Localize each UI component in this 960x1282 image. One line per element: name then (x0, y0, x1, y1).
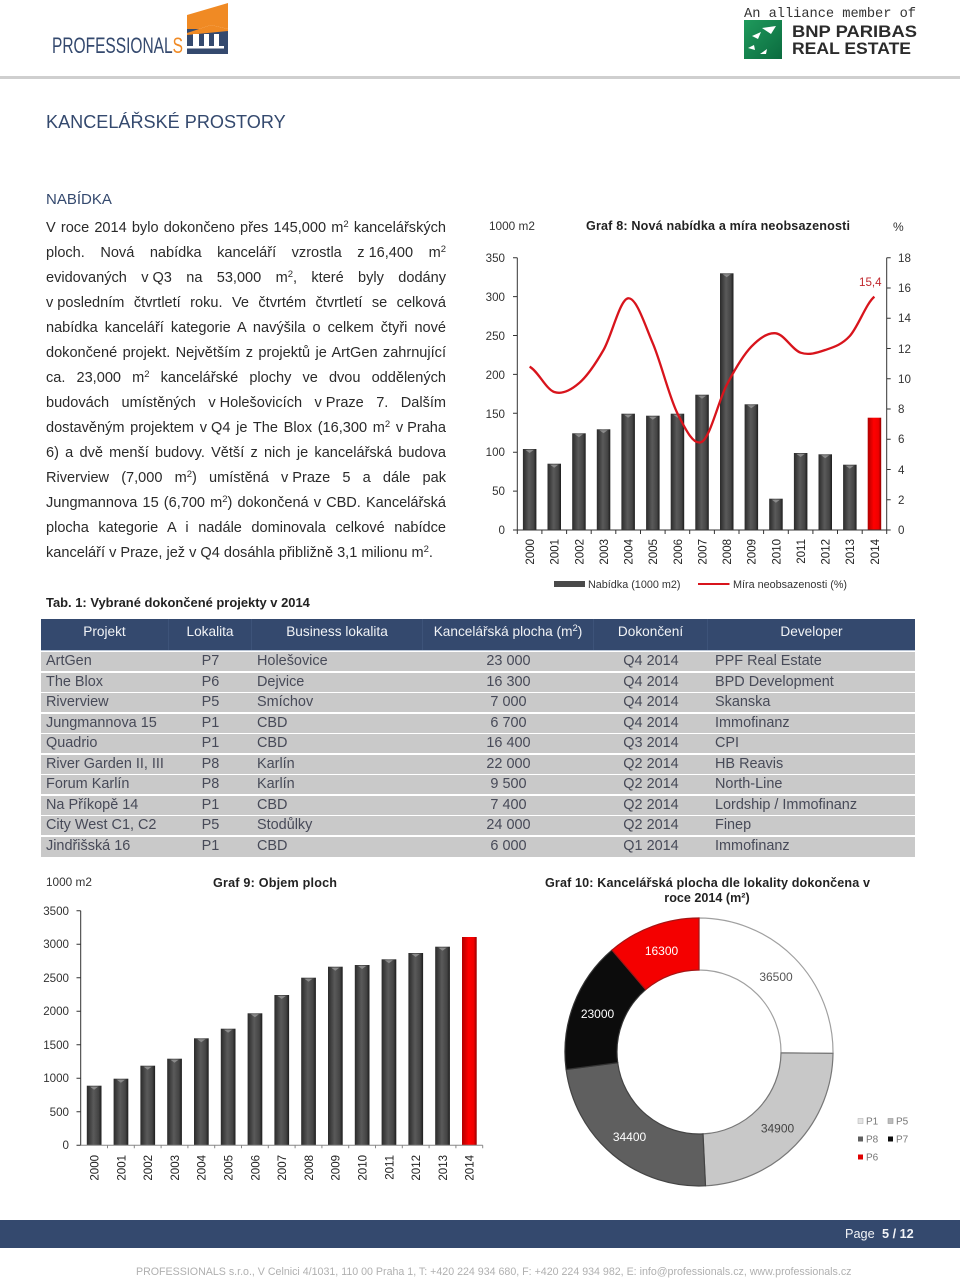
row: Na Příkopě 14: CBD (257, 796, 287, 812)
chart 9 value axis labels: 0 (63, 1139, 69, 1152)
row: Jindřišská 16: CBD (257, 838, 287, 854)
row: City West: P5 (202, 817, 219, 833)
donut value labels: 34400 (613, 1130, 647, 1144)
row: Quadrio: 16 400 (486, 735, 531, 751)
chart 8 year labels: 2013 (845, 539, 857, 565)
row: Jindřišská 16: Q1 2014 (623, 838, 679, 854)
chart 8 right axis labels: 16 (898, 282, 911, 295)
chart 8 left axis labels: 350 (486, 252, 505, 265)
donut value labels: 23000 (581, 1007, 615, 1021)
vacancy value label: 15,4 (859, 276, 882, 289)
row: ArtGen: 23 000 (486, 653, 531, 669)
row: ArtGen: PPF Real Estate (715, 653, 822, 669)
page heading: KANCELÁŘSKÉ PROSTORY (46, 112, 286, 132)
chart 9 year labels: 2001 (116, 1155, 128, 1181)
chart 8 left axis labels: 150 (486, 408, 505, 421)
row: Na Příkopě 14 (41, 796, 915, 814)
table header: Dokončení (618, 624, 683, 639)
donut slice P5 (703, 1053, 833, 1186)
chart 8 legend (554, 579, 847, 591)
donut legend: P8 (866, 1134, 879, 1146)
donut value labels: 36500 (759, 970, 793, 984)
row: Jindřišská 16 (41, 836, 915, 856)
row: The Blox: P6 (202, 674, 219, 690)
row: Forum Karlín: P8 (202, 776, 219, 792)
chart 8 left axis labels (486, 252, 505, 537)
chart 9 year labels: 2006 (250, 1155, 262, 1181)
table header: Developer (780, 624, 843, 639)
footer band with page number: 5 / 12 (882, 1227, 914, 1241)
chart 8 legend: Míra neobsazenosti (%) (733, 579, 847, 591)
chart 8 right axis labels: 18 (898, 252, 911, 265)
chart 9 unit: 1000 m2 (46, 875, 92, 889)
body text: dokončené projekt. Největším z projektů je ArtGen zahrnující (46, 345, 446, 361)
chart 8 title: Graf 8: Nová nabídka a míra neobsazenosti (586, 219, 850, 233)
chart: Graf 8 new supply and vacancy (486, 219, 911, 591)
chart 9 value axis labels: 1000 (43, 1072, 69, 1085)
row: Quadrio: P1 (202, 735, 219, 751)
chart 8 bars (523, 273, 881, 530)
row: Forum Karlín (41, 775, 915, 794)
row: Riverview: 7 000 (490, 694, 527, 710)
row: Jungmannova 15: CBD (257, 714, 287, 730)
row: Na Příkopě 14: 7 400 (490, 796, 527, 812)
row: Quadrio (41, 734, 915, 753)
chart 9 year labels: 2002 (143, 1155, 155, 1181)
row: City West: Finep (715, 817, 751, 833)
chart 9 year labels: 2013 (438, 1155, 450, 1181)
row: City West: 24 000 (486, 817, 531, 833)
row: Quadrio: Quadrio (46, 735, 97, 751)
row: The Blox: The Blox (46, 674, 103, 690)
chart 9 year labels: 2014 (465, 1154, 477, 1181)
chart 8 legend: Nabídka (1000 m2) (588, 579, 680, 591)
chart 9 year labels: 2010 (358, 1155, 370, 1181)
footer band with page number: Page (845, 1227, 875, 1241)
chart 9 title: Graf 9: Objem ploch (213, 876, 337, 890)
row: The Blox (41, 672, 915, 692)
chart 8 year labels: 2014 (870, 538, 882, 565)
chart 10 title (545, 876, 870, 905)
chart 8 year labels: 2012 (821, 539, 833, 565)
row: River Garden: 22 000 (486, 756, 531, 772)
chart 8 year labels: 2001 (550, 539, 562, 565)
chart 8 right axis labels: 14 (898, 312, 911, 325)
row: Riverview: Q4 2014 (623, 694, 679, 710)
row: River Garden: River Garden II, III (46, 756, 164, 772)
body text: nabídka kanceláří kategorie A navýšila o celkem čtyři nové (46, 320, 446, 336)
row: Jindřišská 16: Immofinanz (715, 838, 790, 854)
chart 8 year labels (525, 538, 882, 565)
header logo: Professionals: PROFESSIONALS (52, 33, 183, 58)
chart 8 year labels: 2010 (771, 539, 783, 565)
body text: plocha kategorie A i nadále dominovala celkové nabídce (46, 520, 446, 536)
body text: Riverview (7,000 m2) umístěná v Praze 5 a dále pak (46, 469, 446, 486)
row: Jungmannova 15: 6 700 (490, 714, 527, 730)
table header (41, 619, 915, 651)
chart 8 right axis labels: 8 (898, 403, 904, 416)
row: Jindřišská 16: P1 (202, 838, 219, 854)
row: The Blox: BPD Development (715, 674, 834, 690)
table header: Lokalita (186, 624, 234, 639)
chart 8 right axis labels: 10 (898, 373, 911, 386)
chart 9 value axis labels: 1500 (43, 1039, 69, 1052)
row: Na Příkopě 14: Na Příkopě 14 (46, 796, 138, 812)
donut slice P6 (612, 918, 699, 990)
donut legend (858, 1116, 909, 1164)
row: Forum Karlín: Karlín (257, 776, 295, 792)
chart 8 left axis labels: 300 (486, 291, 505, 304)
row: Jungmannova 15: Q4 2014 (623, 714, 679, 730)
row: ArtGen: ArtGen (46, 653, 92, 669)
chart 8 left axis labels: 100 (486, 446, 505, 459)
row: Forum Karlín: Q2 2014 (623, 776, 679, 792)
row: Quadrio: CBD (257, 735, 287, 751)
chart 8 right unit: % (893, 220, 904, 234)
chart 8 vacancy line (530, 297, 874, 443)
row: Quadrio: CPI (715, 735, 739, 751)
row: River Garden (41, 754, 915, 774)
chart 8 right axis labels: 4 (898, 464, 905, 477)
row: ArtGen (41, 652, 915, 671)
chart 8 year labels: 2007 (697, 539, 709, 565)
footer band with page number (0, 1220, 960, 1248)
row: City West (41, 816, 915, 835)
row: City West: City West C1, C2 (46, 817, 156, 833)
footer contact line: PROFESSIONALS s.r.o., V Celnici 4/1031, 110 00 Praha 1, T: +420 224 934 680, F: +420 224 934 982, E: info@professionals.cz, www.professionals.cz (136, 1266, 851, 1278)
row: Jungmannova 15: Immofinanz (715, 714, 790, 730)
row: Riverview: Smíchov (257, 694, 313, 710)
body text: 6) a dvě menší budovy. Větší z nich je kancelářská budova (46, 445, 446, 461)
chart 8 year labels: 2009 (747, 539, 759, 565)
chart 8 left axis labels: 0 (499, 524, 505, 537)
chart 8 right axis labels: 0 (898, 524, 904, 537)
row: River Garden: HB Reavis (715, 756, 783, 772)
body text: v posledním čtvrtletí roku. Ve čtvrtém čtvrtletí se celková (46, 295, 446, 311)
table header: Business lokalita (286, 624, 388, 639)
chart 8 right axis labels: 2 (898, 494, 904, 507)
row: Jindřišská 16: Jindřišská 16 (46, 838, 130, 854)
chart 9 axes (76, 911, 483, 1148)
chart 8 year labels: 2003 (599, 539, 611, 565)
donut slice P1 (699, 918, 833, 1053)
chart 8 year labels: 2000 (525, 539, 537, 565)
row: The Blox: Q4 2014 (623, 674, 679, 690)
chart 8 left axis labels: 200 (486, 369, 505, 382)
donut value labels (581, 944, 795, 1144)
chart 9 value axis labels: 500 (50, 1106, 69, 1119)
chart 9 bars (87, 937, 477, 1145)
chart 9 year labels: 2007 (277, 1155, 289, 1181)
chart 9 year labels (90, 1154, 477, 1181)
row: Forum Karlín: 9 500 (490, 776, 527, 792)
body text: Jungmannova 15 (6,700 m2) dokončená v CBD. Kancelářská (46, 494, 446, 511)
chart 9 value axis labels (43, 905, 69, 1152)
row: Riverview: Skanska (715, 694, 770, 710)
chart 9 value axis labels: 2000 (43, 1005, 69, 1018)
row: Forum Karlín: Forum Karlín (46, 776, 129, 792)
chart 9 year labels: 2009 (331, 1155, 343, 1181)
chart 8 left axis labels: 50 (492, 485, 505, 498)
row: Riverview (41, 693, 915, 712)
chart: Graf 9 stock volume (43, 875, 484, 1181)
table: selected completed projects (41, 619, 915, 857)
chart 8 right axis labels: 12 (898, 343, 911, 356)
donut slice P7 (565, 950, 646, 1070)
body text: ca. 23,000 m2 kancelářské plochy ve dvou oddělených (46, 369, 446, 386)
chart 9 value axis labels: 3000 (43, 938, 69, 951)
chart 8 year labels: 2008 (722, 539, 734, 565)
row: City West: Stodůlky (257, 817, 312, 833)
row: Jungmannova 15 (41, 714, 915, 732)
chart 8 year labels: 2005 (648, 539, 660, 565)
body text: ploch. Nová nabídka kanceláří vzrostla z 16,400 m2 (46, 244, 446, 261)
header logo: BNP Paribas Real Estate: An alliance member of (744, 7, 916, 22)
row: River Garden: Q2 2014 (623, 756, 679, 772)
chart 9 year labels: 2003 (170, 1155, 182, 1181)
chart: Graf 10 donut by location (545, 876, 909, 1187)
donut value labels: 34900 (761, 1122, 795, 1136)
body text: V roce 2014 bylo dokončeno přes 145,000 m2 kancelářských (46, 219, 446, 236)
chart 9 year labels: 2000 (90, 1155, 102, 1181)
chart 9 year labels: 2008 (304, 1155, 316, 1181)
row: City West: Q2 2014 (623, 817, 679, 833)
donut legend: P7 (896, 1134, 909, 1146)
chart 8 axes (513, 258, 891, 534)
table header: Projekt (83, 624, 126, 639)
row: Na Příkopě 14: Lordship / Immofinanz (715, 796, 857, 812)
chart 8 year labels: 2004 (624, 538, 636, 565)
table caption: Tab. 1: Vybrané dokončené projekty v 2014 (46, 594, 310, 610)
body text (46, 219, 446, 561)
chart 10 title: Graf 10: Kancelářská plocha dle lokality dokončena v (545, 876, 870, 890)
donut value labels: 16300 (645, 944, 679, 958)
row: Quadrio: Q3 2014 (623, 735, 679, 751)
row: The Blox: Dejvice (257, 674, 304, 690)
row: Na Příkopě 14: Q2 2014 (623, 796, 679, 812)
row: Na Příkopě 14: P1 (202, 796, 219, 812)
chart 9 value axis labels: 2500 (43, 972, 69, 985)
body text: budovách umístěných v Holešovicích v Praze 7. Dalším (46, 395, 446, 411)
chart 8 right axis labels (898, 252, 911, 537)
row: ArtGen: P7 (202, 653, 219, 669)
row: ArtGen: Holešovice (257, 653, 328, 669)
body text: dostavěným projektem v Q4 je The Blox (16,300 m2 v Praha (46, 419, 446, 436)
header logo: BNP Paribas Real Estate: BNP PARIBAS (792, 22, 917, 41)
donut slice P8 (566, 1063, 706, 1186)
chart 8 year labels: 2006 (673, 539, 685, 565)
body text: evidovaných v Q3 na 53,000 m2, které byly dodány (46, 269, 446, 286)
donut legend: P6 (866, 1152, 879, 1164)
row: River Garden: P8 (202, 756, 219, 772)
donut legend: P5 (896, 1116, 909, 1128)
chart 9 year labels: 2004 (197, 1154, 209, 1181)
row: The Blox: 16 300 (486, 674, 531, 690)
row: Riverview: P5 (202, 694, 219, 710)
row: Jungmannova 15: Jungmannova 15 (46, 714, 157, 730)
table header: Kancelářská plocha (m2) (434, 623, 582, 639)
chart 8 left unit: 1000 m2 (489, 219, 535, 233)
row: River Garden: Karlín (257, 756, 295, 772)
chart 9 year labels: 2012 (411, 1155, 423, 1181)
row: Forum Karlín: North-Line (715, 776, 782, 792)
row: Jungmannova 15: P1 (202, 714, 219, 730)
row: Jindřišská 16: 6 000 (490, 838, 527, 854)
chart 8 right axis labels: 6 (898, 433, 904, 446)
chart 8 year labels: 2011 (796, 539, 808, 564)
header logo: Professionals (52, 3, 228, 58)
section heading: Nabídka: NABÍDKA (46, 191, 112, 208)
row: Riverview: Riverview (46, 694, 109, 710)
chart 9 year labels: 2011 (384, 1155, 396, 1180)
donut legend: P1 (866, 1116, 879, 1128)
header logo: BNP Paribas Real Estate (744, 7, 917, 59)
chart 9 year labels: 2005 (224, 1155, 236, 1181)
chart 10 title: roce 2014 (m²) (664, 891, 750, 905)
chart 8 left axis labels: 250 (486, 330, 505, 343)
body text: kanceláří v Praze, jež v Q4 dosáhla přibližně 3,1 milionu m2. (46, 544, 433, 561)
chart 9 value axis labels: 3500 (43, 905, 69, 918)
chart 8 year labels: 2002 (574, 539, 586, 565)
header logo: BNP Paribas Real Estate: REAL ESTATE (792, 39, 911, 58)
row: ArtGen: Q4 2014 (623, 653, 679, 669)
